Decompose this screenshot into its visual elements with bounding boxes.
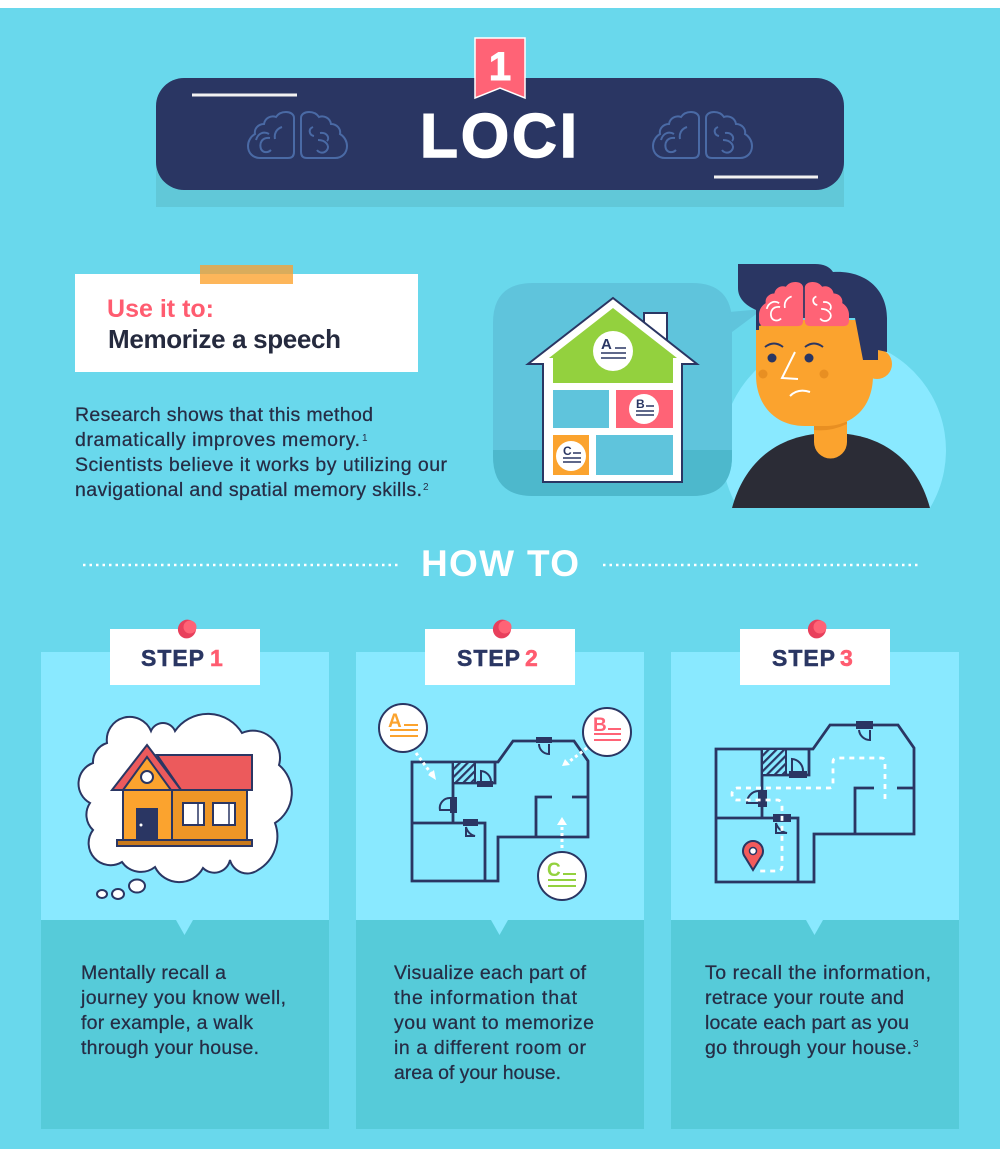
icon: house: B bbox=[636, 397, 645, 411]
intro text: Scientists believe it works by utilizing our bbox=[75, 454, 448, 476]
panel: step 1 bbox=[41, 617, 329, 1129]
step 2 text: Visualize each part of bbox=[394, 962, 587, 984]
step 1 text bbox=[80, 962, 286, 1059]
panel: step 2 bbox=[356, 617, 644, 1129]
intro text: dramatically improves memory. bbox=[75, 429, 360, 451]
step 2 text bbox=[394, 962, 594, 1084]
step 3 text: retrace your route and bbox=[705, 987, 904, 1009]
step 3 tag bbox=[740, 617, 890, 685]
step 1 text: through your house. bbox=[81, 1037, 259, 1059]
icon: left brain outline bbox=[248, 112, 347, 158]
step 2 tag: 2 bbox=[525, 645, 538, 671]
step 1 tag: STEP bbox=[141, 645, 204, 671]
bubble A: A bbox=[388, 711, 402, 732]
step 3 text: To recall the information, bbox=[705, 962, 931, 984]
heading: memorize a speech: Memorize a speech bbox=[108, 324, 341, 354]
icon: house bbox=[112, 745, 252, 846]
tape bbox=[200, 265, 293, 284]
title banner bbox=[156, 78, 844, 207]
icon: house: A bbox=[601, 336, 612, 353]
icon: house bbox=[528, 298, 697, 482]
icon: right brain outline bbox=[653, 112, 752, 158]
arrows bbox=[416, 748, 587, 848]
intro text: navigational and spatial memory skills. bbox=[75, 479, 422, 501]
icon: brain bbox=[759, 282, 849, 326]
step 3 tag: STEP bbox=[772, 645, 835, 671]
intro text: Research shows that this method bbox=[75, 404, 373, 426]
number ribbon: 1 bbox=[489, 45, 511, 89]
step 3 text: 3 bbox=[913, 1039, 919, 1050]
speech bubble with house bbox=[493, 283, 763, 496]
bubble B: B bbox=[593, 715, 607, 736]
icon: map pin bbox=[743, 841, 763, 870]
thought cloud with house bbox=[79, 714, 292, 899]
bubble C bbox=[538, 852, 586, 900]
step 3 text: go through your house. bbox=[705, 1037, 912, 1059]
how to heading: HOW TO bbox=[421, 543, 579, 584]
step 3 tag: 3 bbox=[840, 645, 853, 671]
bubble B bbox=[583, 708, 631, 756]
bubble C: C bbox=[547, 860, 561, 881]
step 2 tag: STEP bbox=[457, 645, 520, 671]
step 1 text: Mentally recall a bbox=[81, 962, 226, 984]
label: use it to: Use it to: bbox=[107, 295, 214, 323]
title text: LOCI bbox=[420, 102, 577, 171]
step 1 text: journey you know well, bbox=[80, 987, 286, 1009]
intro text: 1 bbox=[362, 433, 368, 444]
step 2 text: the information that bbox=[394, 987, 578, 1009]
route bbox=[732, 758, 885, 871]
floor plan with route bbox=[716, 721, 914, 882]
step 2 text: you want to memorize bbox=[394, 1012, 594, 1034]
face bbox=[758, 344, 828, 396]
intro text bbox=[75, 404, 448, 501]
step 3 text bbox=[705, 962, 931, 1059]
step 1 text: for example, a walk bbox=[81, 1012, 253, 1034]
step 3 text: locate each part as you bbox=[705, 1012, 909, 1034]
step 2 tag bbox=[425, 617, 575, 685]
floor plan bbox=[379, 704, 631, 900]
card: use it to bbox=[75, 265, 418, 372]
number ribbon bbox=[475, 38, 525, 98]
step 2 text: in a different room or bbox=[394, 1037, 586, 1059]
background circle behind character bbox=[722, 338, 946, 508]
step 1 tag bbox=[110, 617, 260, 685]
bubble A bbox=[379, 704, 427, 752]
step 2 text: area of your house. bbox=[394, 1062, 561, 1084]
intro text: 2 bbox=[423, 482, 429, 493]
icon: house: C bbox=[563, 444, 572, 458]
step 1 tag: 1 bbox=[210, 645, 223, 671]
character thinking bbox=[732, 264, 930, 508]
panel: step 3 bbox=[671, 617, 959, 1129]
hair bbox=[738, 264, 887, 360]
